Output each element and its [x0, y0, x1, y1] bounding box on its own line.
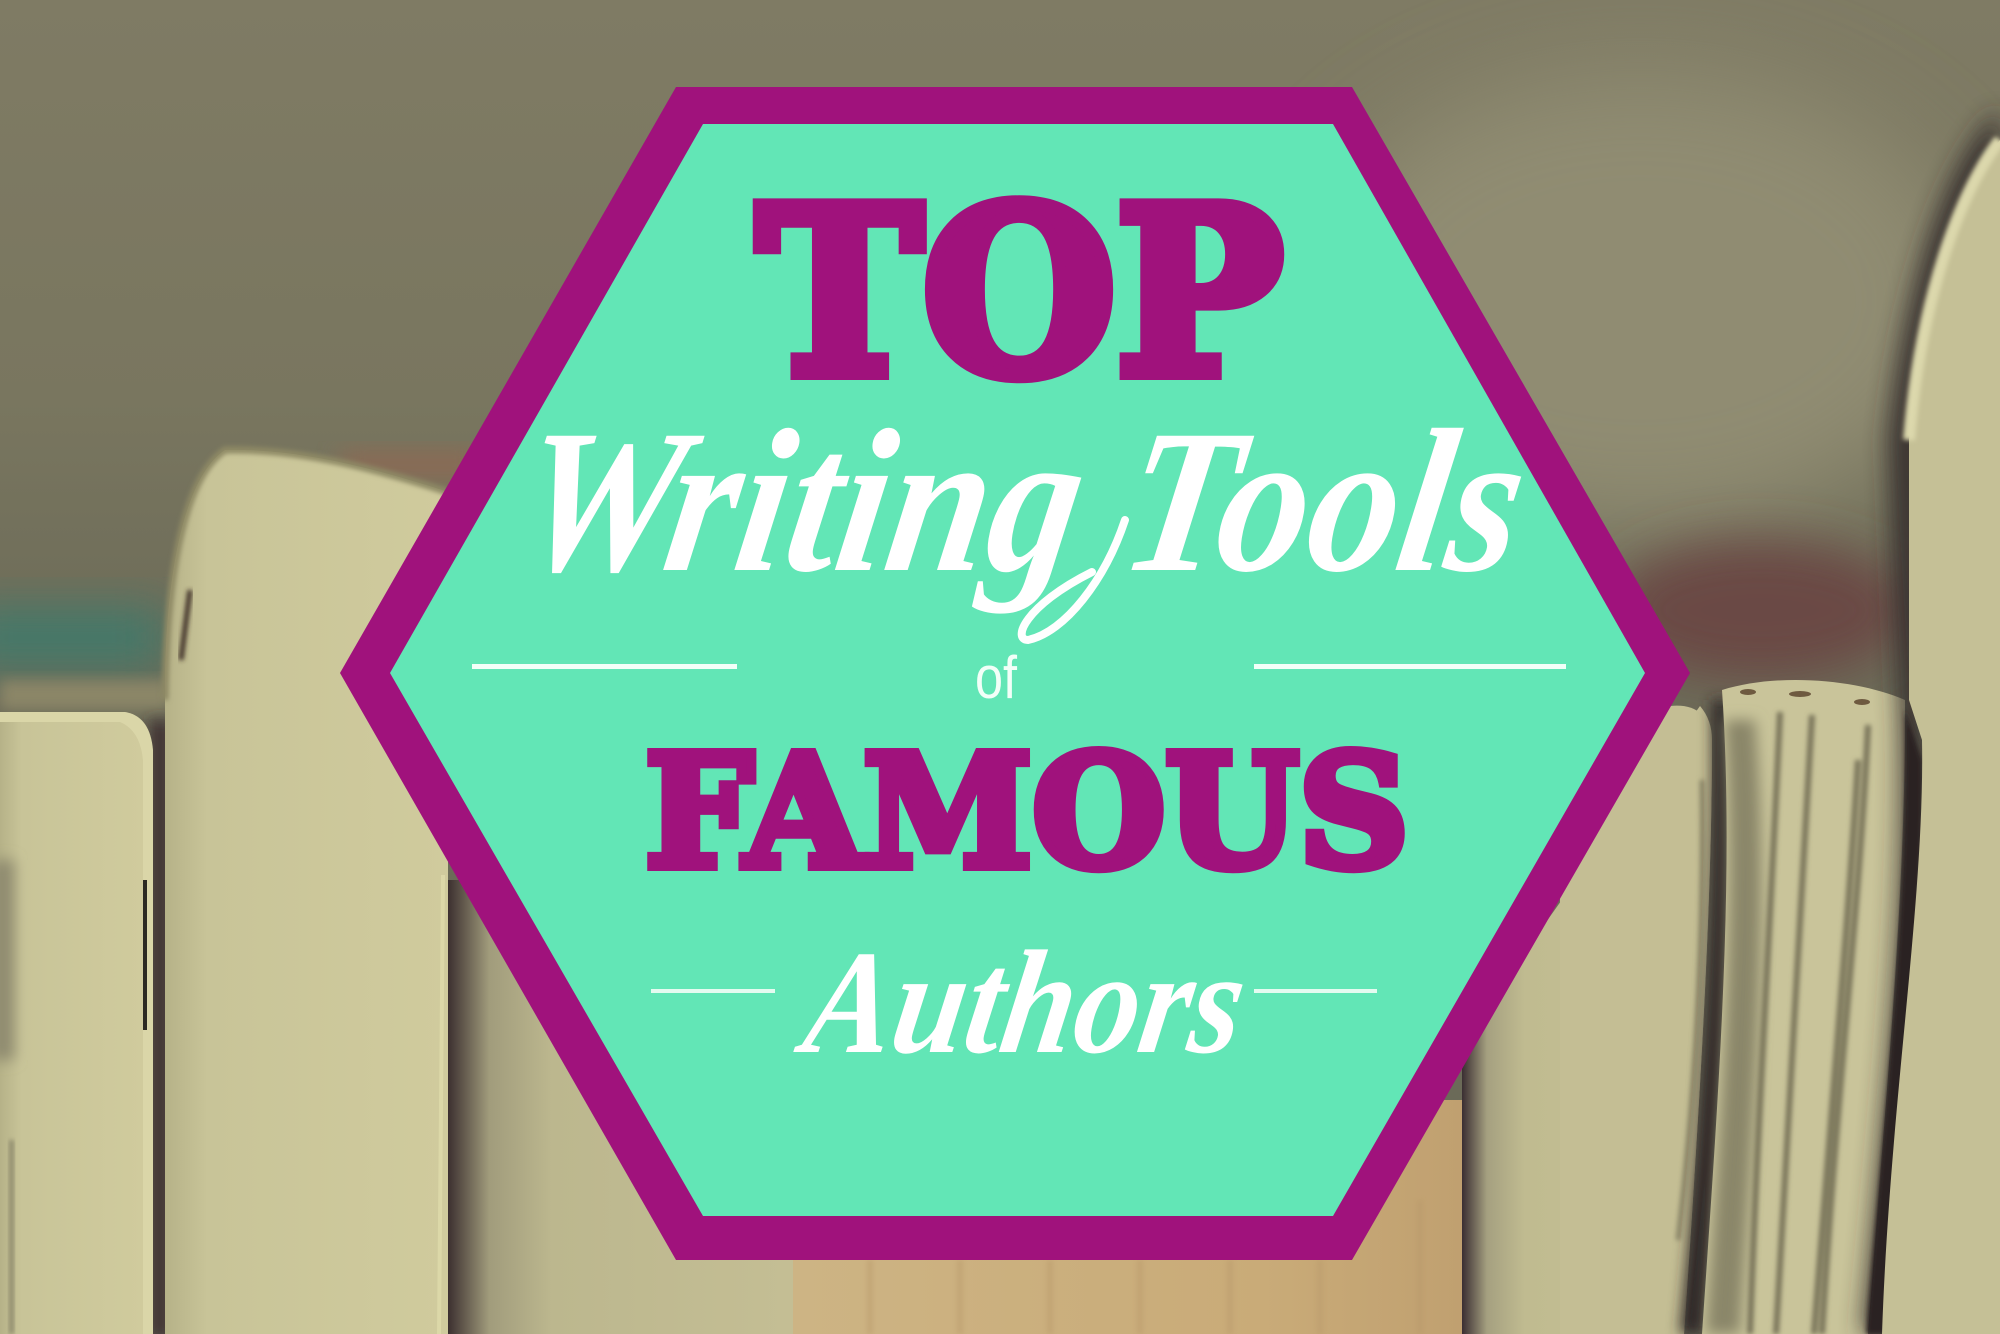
heading: FAMOUS: FAMOUS — [645, 720, 1409, 903]
divider: right of "of" — [1254, 664, 1566, 669]
hexagon badge — [340, 87, 1690, 1260]
hexagon fill — [390, 124, 1645, 1216]
swash: g descender loop — [1022, 520, 1125, 640]
heading: Writing Tools: Writing Tools — [505, 387, 1541, 615]
heading: TOP: TOP — [757, 158, 1283, 428]
hexagon border — [340, 87, 1690, 1260]
book: tall far right — [1862, 110, 2000, 1334]
divider: left of Authors — [651, 989, 775, 993]
text: of: of — [975, 644, 1017, 711]
book: right of hexagon — [1462, 706, 1712, 1334]
book: tall second from left — [165, 450, 448, 1334]
heading: Authors: Authors — [788, 921, 1257, 1085]
divider: right of Authors — [1254, 989, 1377, 993]
book: ribbed second from right — [1680, 680, 1905, 1334]
divider: left of "of" — [472, 664, 737, 669]
book: far left — [0, 712, 170, 1334]
book: behind hexagon lower left — [448, 880, 793, 1334]
book pages: centre bottom — [793, 1100, 1465, 1334]
